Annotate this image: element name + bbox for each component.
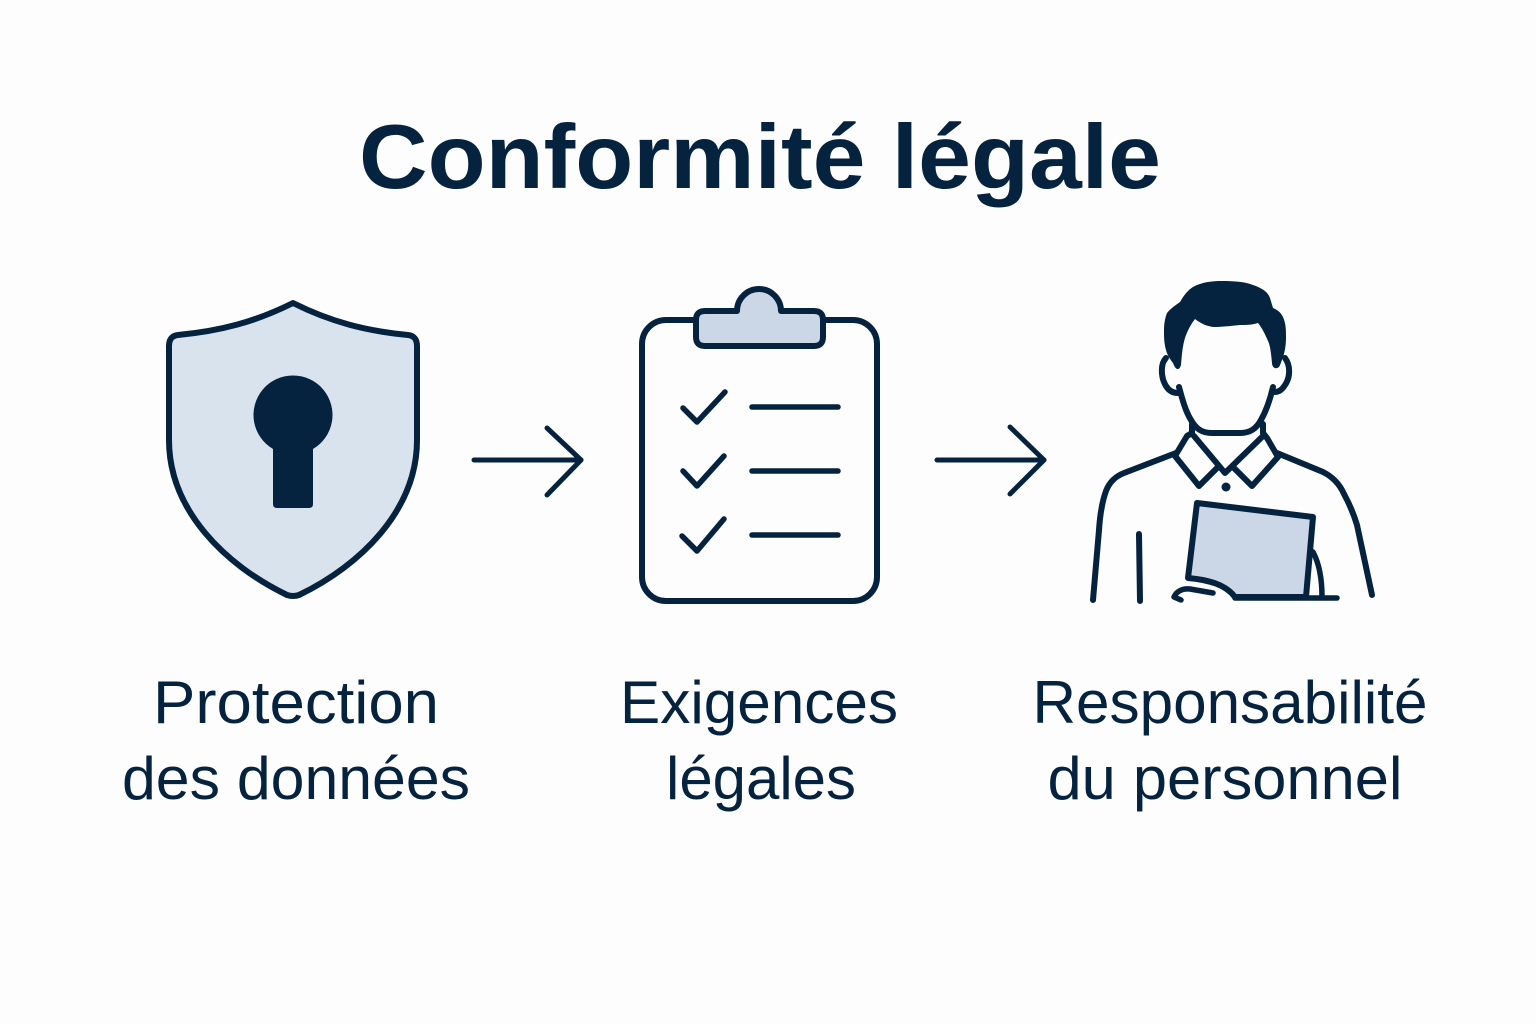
arrow: clipboard to person <box>937 427 1044 494</box>
icon: clipboard checklist <box>642 289 877 601</box>
arm crease <box>1139 534 1140 601</box>
tablet <box>1188 503 1313 597</box>
arrow: shield to clipboard <box>474 428 581 495</box>
shoulders and left arm <box>1093 453 1176 600</box>
hair <box>1164 281 1286 369</box>
collar button <box>1222 482 1230 492</box>
check item 1 <box>683 392 838 422</box>
title: Conformité légale <box>359 107 1161 208</box>
hand and base line <box>1174 552 1337 600</box>
face outline <box>1179 387 1273 433</box>
right shoulder and arm <box>1277 453 1372 595</box>
label: legal requirements second line: légales <box>666 745 856 812</box>
icon: shield with keyhole <box>169 303 417 596</box>
label: staff responsibility second line: du personnel <box>1048 745 1402 812</box>
label: data protection: Protection <box>153 669 439 736</box>
check item 3 <box>682 519 838 551</box>
label: legal requirements: Exigences <box>620 669 898 736</box>
collar <box>1175 424 1278 486</box>
ears <box>1162 358 1289 393</box>
check item 2 <box>683 456 838 486</box>
label: staff responsibility: Responsabilité <box>1032 669 1428 736</box>
label: data protection second line: des données <box>122 745 470 812</box>
icon: person with tablet <box>1093 281 1372 601</box>
